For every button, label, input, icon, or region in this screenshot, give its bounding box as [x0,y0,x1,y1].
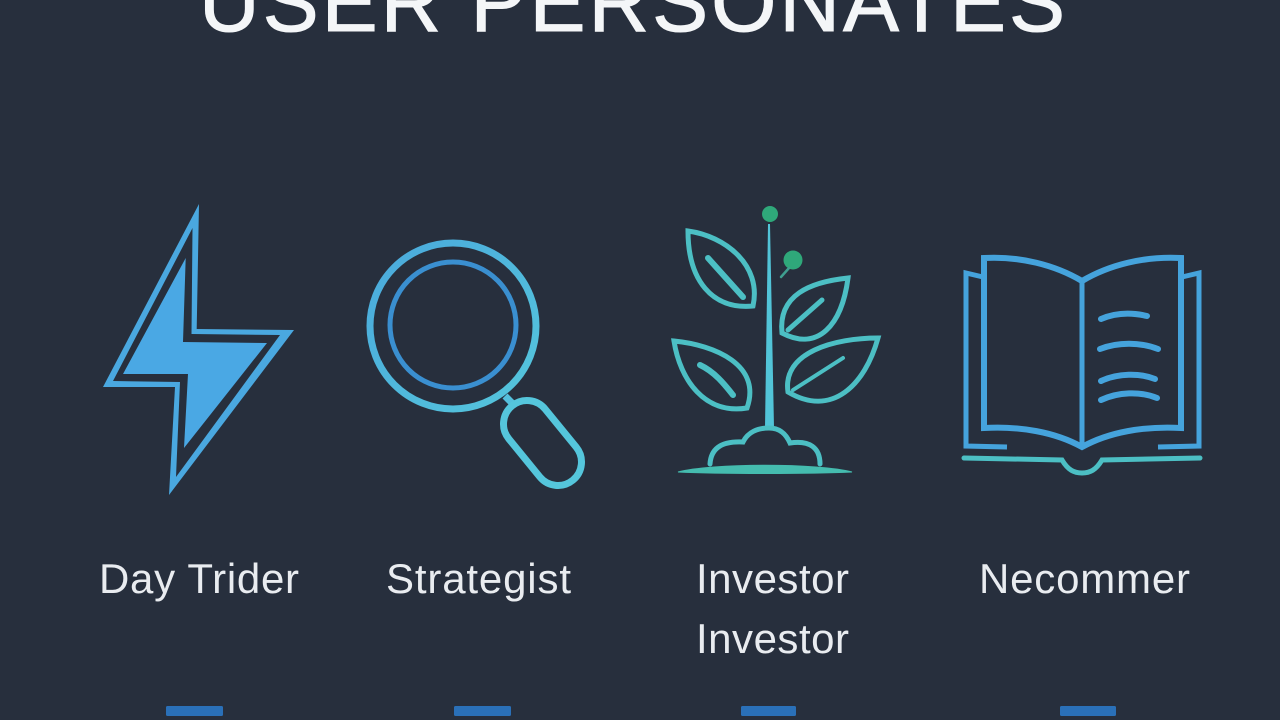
icon: growing plant [674,206,878,474]
icon: magnifying glass [370,243,591,495]
label: Day Trider: Day Trider [99,555,299,602]
accent bar [1060,706,1116,716]
persona: Strategist [370,243,591,716]
persona: Day Trider [99,204,299,716]
icon: open book [964,258,1200,473]
accent bar [454,706,511,716]
label: Investor: Investor [696,555,849,602]
label: Necommer: Necommer [979,555,1190,602]
icon: lightning bolt [103,204,294,495]
label: Investor second line: Investor [696,615,849,662]
accent bar [166,706,223,716]
persona: Investor [674,206,878,716]
persona: Necommer [964,258,1200,716]
accent bar [741,706,796,716]
label: Strategist: Strategist [386,555,571,602]
